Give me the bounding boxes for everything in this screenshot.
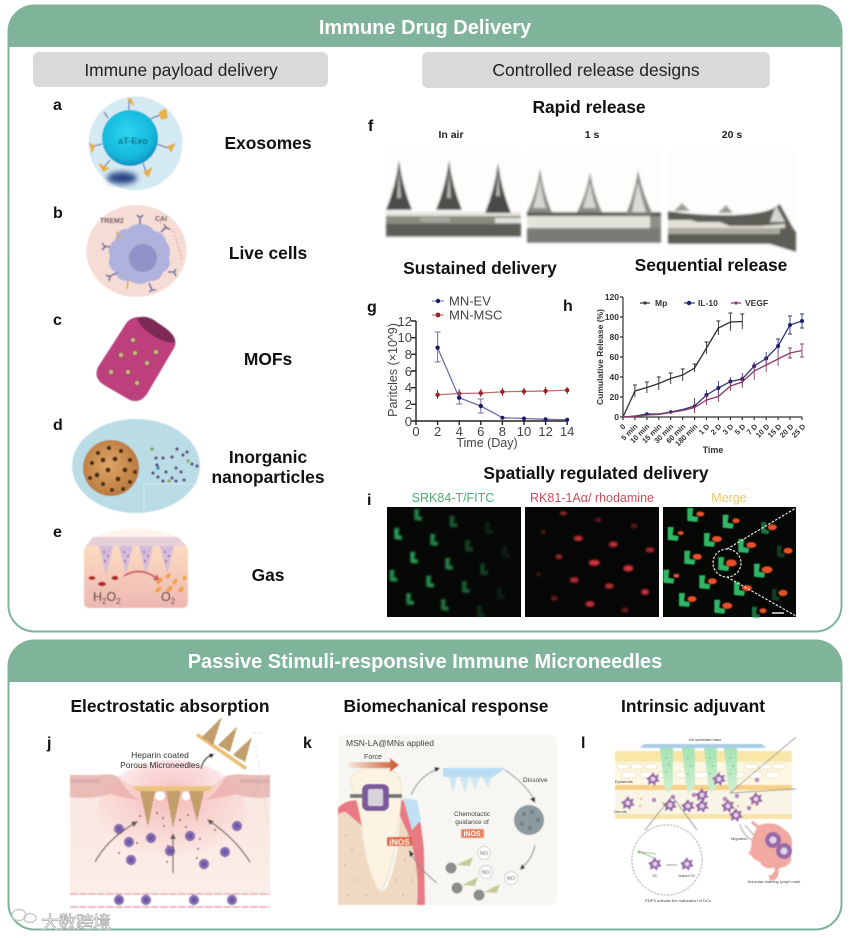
label: Gas xyxy=(252,565,284,585)
icon: oxygen generating microneedle: O xyxy=(161,590,171,604)
chart h: cumulative release: 10 D xyxy=(754,422,772,440)
chart h: cumulative release: 0 xyxy=(618,422,627,431)
title: Passive Stimuli-responsive Immune Microneedles xyxy=(188,651,662,673)
icon: porous sphere and molecules xyxy=(72,419,200,513)
series: VEGF xyxy=(623,344,804,417)
figure k: biomechanical response: k xyxy=(303,735,312,752)
captions: 20 s xyxy=(722,129,742,141)
title: Immune Drug Delivery xyxy=(319,17,532,39)
figure l: intrinsic adjuvant: Mature DC xyxy=(679,874,696,878)
micrograph: red channel xyxy=(525,507,659,617)
label: Inorganic xyxy=(229,447,307,467)
illustration: skin with porous microneedles xyxy=(70,717,270,908)
legend: MN-MSC xyxy=(449,308,502,322)
figure l: intrinsic adjuvant: Migration xyxy=(731,836,747,841)
item b: live cells xyxy=(53,205,307,297)
legend xyxy=(432,294,502,322)
chart g: particles over time: 6 xyxy=(477,424,484,439)
series: MN-MSC xyxy=(435,387,569,399)
icon: chat bubbles xyxy=(12,910,36,922)
subheading: Controlled release designs: Controlled release designs xyxy=(492,60,700,80)
chart g: particles over time: 0 xyxy=(412,424,420,439)
icon: oxygen generating microneedle xyxy=(84,528,188,608)
chart h: cumulative release: 0 xyxy=(614,412,619,422)
illustration: orthodontic tooth: NO xyxy=(507,876,516,882)
callout: magnified dashed circle xyxy=(713,508,796,616)
chart h: cumulative release: 3 D xyxy=(721,422,736,437)
icon: live cell: CAI xyxy=(155,216,167,223)
figure l: intrinsic adjuvant xyxy=(581,735,801,903)
chart g: particles over time: 4 xyxy=(405,380,412,395)
legend: IL-10 xyxy=(698,298,718,308)
illustration: skin layers xyxy=(615,737,796,895)
panel i: fluorescence images: SRK84-T/FITC xyxy=(412,491,494,505)
micrograph: 1 s xyxy=(527,150,661,244)
chart h: cumulative release: 20 D xyxy=(778,422,796,440)
captions: In air xyxy=(438,129,464,141)
heading: intrinsic adjuvant: Intrinsic adjuvant xyxy=(621,696,765,716)
panel f: rapid release micrographs xyxy=(368,118,796,252)
micrograph: green channel xyxy=(387,507,521,618)
item c: MOFs xyxy=(53,312,292,401)
chart h: cumulative release: 60 xyxy=(610,352,619,362)
figure l: intrinsic adjuvant: Epidermis xyxy=(615,779,633,784)
micrograph: 20 s xyxy=(668,150,796,252)
icon: live cell: TREM2 xyxy=(100,218,124,225)
chart h: cumulative release: 60 min xyxy=(664,422,688,445)
chart h: cumulative release: 180 min xyxy=(673,422,700,448)
icon: oxygen generating microneedle: O xyxy=(106,590,116,604)
illustration: orthodontic tooth xyxy=(338,735,557,905)
chart g: particles over time: 8 xyxy=(499,424,506,439)
chart h: cumulative release: 5 D xyxy=(733,422,748,437)
label: nanoparticles xyxy=(211,467,325,487)
watermark xyxy=(12,910,111,933)
chart h: cumulative release: 15 min xyxy=(640,422,664,445)
legend xyxy=(640,298,768,308)
heading: biomechanical response: Biomechanical response xyxy=(344,696,549,716)
chart h: cumulative release: 20 xyxy=(610,392,619,402)
figure k: biomechanical response: guidance of xyxy=(455,819,489,826)
figure l: intrinsic adjuvant: l xyxy=(581,735,585,752)
heading: sequential release: Sequential release xyxy=(635,255,788,275)
item b: live cells: b xyxy=(53,205,63,222)
micrograph: in air xyxy=(386,150,521,238)
item e: gas xyxy=(53,524,284,608)
item d: inorganic nanoparticles: d xyxy=(53,417,63,434)
chart h: cumulative release: 10 min xyxy=(628,422,652,445)
illustration: orthodontic tooth: NO xyxy=(480,851,489,857)
icon: oxygen generating microneedle: H xyxy=(93,590,102,604)
microneedle patch xyxy=(443,768,506,777)
legend: VEGF xyxy=(745,298,768,308)
label: MOFs xyxy=(244,349,292,369)
chart h: cumulative release: 1 D xyxy=(697,422,712,437)
figure j: electrostatic absorption microneedles xyxy=(46,717,270,908)
subheading: Controlled release designs xyxy=(422,52,770,88)
header band: Immune Drug Delivery xyxy=(8,6,842,47)
panel i: fluorescence images: i xyxy=(367,492,371,509)
series: Mp xyxy=(623,313,744,417)
header band xyxy=(8,640,842,682)
chart h: cumulative release: 7 D xyxy=(745,422,760,437)
chart g: particles over time: 14 xyxy=(560,424,574,439)
heading: rapid release: Rapid release xyxy=(532,97,646,117)
item e: gas: e xyxy=(53,524,62,541)
chart h: cumulative release: 40 xyxy=(610,372,619,382)
item c: MOFs: c xyxy=(53,312,62,329)
icon: oxygen generating microneedle: 2 xyxy=(116,597,121,606)
item a: exosomes xyxy=(53,96,312,190)
chart h: cumulative release: 30 min xyxy=(652,422,676,445)
chart h: cumulative release: 25 D xyxy=(790,422,808,440)
chart g: particles over time: 4 xyxy=(456,424,463,439)
figure l: intrinsic adjuvant: DC xyxy=(652,874,658,878)
series: IL-10 xyxy=(623,314,804,417)
chart h: cumulative release: 100 xyxy=(605,312,619,322)
micrograph: merge xyxy=(663,507,796,619)
captions: 1 s xyxy=(585,129,599,141)
chart h: cumulative release: Time xyxy=(703,445,723,455)
chart h: cumulative release: h xyxy=(563,298,573,315)
chart h: cumulative release: 120 xyxy=(605,292,619,302)
figure l: intrinsic adjuvant: Auricular draining lymph node xyxy=(748,879,801,884)
chart g: particles over time: 10 xyxy=(517,424,531,439)
watermark: 大数跨境 xyxy=(41,913,111,933)
heading: sustained delivery: Sustained delivery xyxy=(403,258,557,278)
figure j: electrostatic absorption microneedles: Porous Microneedles xyxy=(120,760,200,770)
chart h: cumulative release: 5 min xyxy=(619,422,640,442)
chart g: particles over time: Paritcles (×10^9) xyxy=(386,323,400,417)
panel: Immune Drug Delivery xyxy=(8,6,842,632)
figure k: biomechanical response: Dissolve xyxy=(523,777,548,784)
icon: MOF cylinder xyxy=(96,317,175,401)
captions xyxy=(438,129,742,141)
chart h: cumulative release: 2 D xyxy=(709,422,724,437)
heading: spatially regulated delivery: Spatially regulated delivery xyxy=(483,463,709,483)
illustration: orthodontic tooth: iNOS xyxy=(389,837,410,847)
chart g: particles over time: 8 xyxy=(405,347,412,362)
icon: exosome: aT-Exo xyxy=(118,136,148,146)
heading: electrostatic absorption: Electrostatic absorption xyxy=(70,696,270,716)
panel f: rapid release micrographs: f xyxy=(368,118,374,135)
series: MN-EV xyxy=(435,332,569,422)
icon: oxygen generating microneedle: 2 xyxy=(102,597,107,606)
chart g: particles over time: g xyxy=(367,299,377,316)
chart g: particles over time: 12 xyxy=(398,314,412,329)
chart g: particles over time: 10 xyxy=(398,330,412,345)
icon: exosome xyxy=(88,96,182,190)
subheading: Immune payload delivery: Immune payload delivery xyxy=(84,60,278,80)
figure j: electrostatic absorption microneedles: j xyxy=(46,735,51,752)
label: Exosomes xyxy=(224,133,312,153)
illustration: orthodontic tooth: NO xyxy=(482,870,491,876)
chart g: particles over time: Time (Day) xyxy=(456,436,518,450)
chart g: particles over time: 0 xyxy=(405,414,412,429)
figure k: biomechanical response: Force xyxy=(364,754,382,761)
panel i: fluorescence images: Merge xyxy=(711,491,747,505)
chart h: cumulative release: 15 D xyxy=(766,422,784,440)
panel i: fluorescence images xyxy=(367,491,796,619)
chart h: cumulative release: Cumulative Release (%) xyxy=(595,309,605,405)
label: Live cells xyxy=(229,243,307,263)
legend: MN-EV xyxy=(449,294,491,308)
figure k: biomechanical response xyxy=(303,735,557,905)
figure k: biomechanical response: MSN-LA@MNs applied xyxy=(346,738,434,748)
chart h: cumulative release xyxy=(563,292,808,455)
chart g: particles over time: 12 xyxy=(538,424,553,439)
subheading: Immune payload delivery xyxy=(33,52,328,87)
chart g: particles over time: 2 xyxy=(434,424,441,439)
figure l: intrinsic adjuvant: HA substrate base xyxy=(689,737,722,742)
figure l: intrinsic adjuvant: PNPS activate the maturation of DCs xyxy=(645,898,711,903)
legend: Mp xyxy=(655,298,667,308)
figure k: biomechanical response: Chemotactic xyxy=(454,811,491,818)
panel i: fluorescence images: RK81-1Aα/ rhodamine xyxy=(530,491,654,505)
chart g: particles over time: 2 xyxy=(405,397,412,412)
figure j: electrostatic absorption microneedles: Heparin coated xyxy=(131,750,189,760)
panel: Passive Stimuli-responsive Immune Microneedles xyxy=(8,640,842,930)
chart g: particles over time: 6 xyxy=(405,364,412,379)
item a: exosomes: a xyxy=(53,97,62,114)
chart g: particles over time xyxy=(367,294,574,450)
icon: oxygen generating microneedle: 2 xyxy=(171,597,176,606)
figure k: biomechanical response: iNOS xyxy=(463,831,481,838)
floating patch xyxy=(196,733,247,770)
chart h: cumulative release: 80 xyxy=(610,332,619,342)
figure l: intrinsic adjuvant: Dermis xyxy=(614,809,627,814)
icon: live cell xyxy=(86,205,186,297)
item d: inorganic nanoparticles xyxy=(53,417,325,513)
